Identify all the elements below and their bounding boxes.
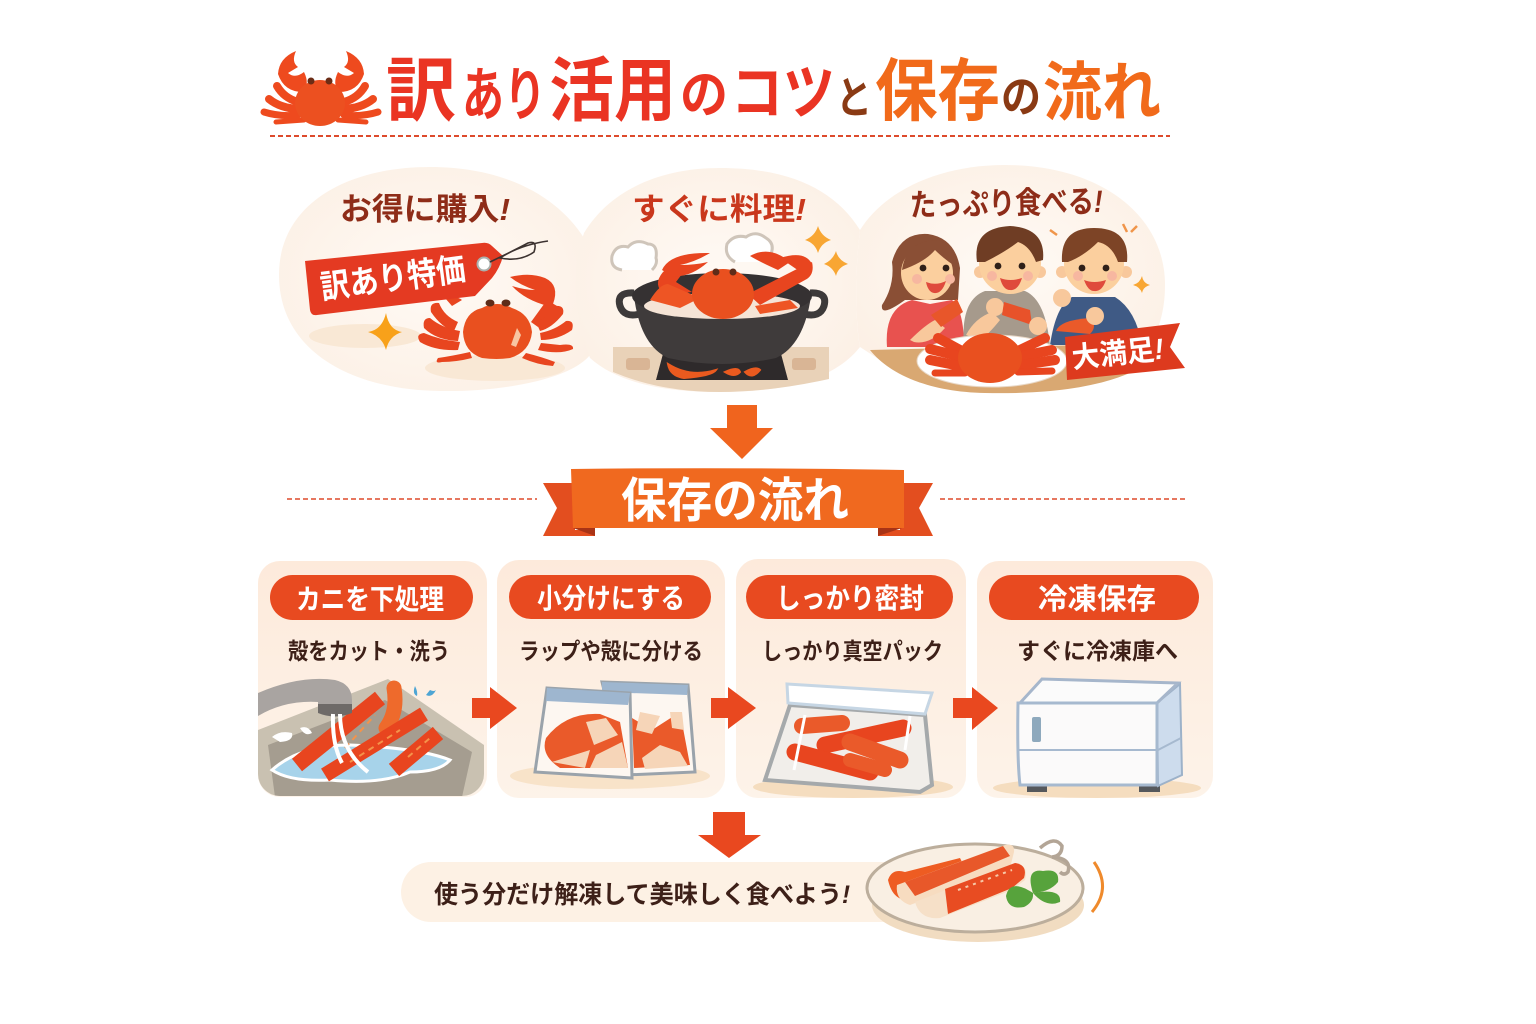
icon: price tag: 訳あり特価 <box>318 250 468 306</box>
icon: woman <box>882 234 964 347</box>
illustration: sink <box>258 679 487 797</box>
callout: satisfaction banner: 大満足! <box>1070 332 1166 375</box>
panel: step 2 portion <box>497 560 725 798</box>
panel: eat plenty <box>856 165 1185 393</box>
heading: bargain: お得に購入! <box>340 192 510 227</box>
heading: red part: コツ <box>731 60 835 127</box>
text: step 2 description: ラップや殻に分ける <box>519 638 703 664</box>
illustration: freezer <box>1018 679 1182 792</box>
label: step 3: しっかり密封 <box>776 583 924 614</box>
heading: eat: たっぷり食べる! <box>909 184 1103 223</box>
heading: cook: すぐに料理 ! <box>632 192 806 227</box>
heading: connector 2: の <box>1001 73 1041 122</box>
icon: sparkle <box>368 313 402 350</box>
icon: steam <box>1040 841 1069 874</box>
callout: satisfaction banner <box>1065 323 1185 380</box>
icon: joy marks <box>1050 224 1137 235</box>
icon: table <box>870 344 1132 393</box>
icon: garnish leaves <box>1006 870 1060 908</box>
arrow: down to storage <box>710 405 773 459</box>
arrow: step 2 to 3 <box>711 687 756 729</box>
icon: boy <box>1050 228 1142 345</box>
panel: step 4 freeze <box>977 561 1213 798</box>
illustration: plated crab legs <box>867 841 1103 942</box>
icon: sparkles <box>805 226 848 276</box>
label: step 4 <box>989 575 1199 620</box>
title with crab icon <box>264 51 1161 130</box>
icon: flames <box>668 364 760 378</box>
panel: step 3 seal <box>736 559 966 798</box>
heading: orange part: 流れ <box>1043 57 1161 129</box>
heading: red part: の <box>680 67 728 125</box>
label: step 1 <box>270 575 473 620</box>
heading: orange part <box>875 54 1161 130</box>
panel: cook right away <box>576 168 860 392</box>
icon: stove <box>613 347 829 392</box>
label: step 1: カニを下処理 <box>296 584 444 615</box>
icon: price tag <box>305 241 548 315</box>
heading: red part <box>386 52 835 130</box>
icon: steam clouds <box>612 234 772 270</box>
text: step 4 description: すぐに冷凍庫へ <box>1017 638 1178 664</box>
panel: step 1 prep <box>258 561 487 797</box>
illustration: vacuum bag <box>765 684 932 792</box>
callout: conclusion <box>401 862 921 922</box>
panel: buy at a bargain <box>279 167 590 391</box>
callout: conclusion: 使う分だけ解凍して美味しく食べよう! <box>434 881 850 909</box>
heading: orange part: 保存 <box>875 54 1000 130</box>
heading: red part: 活 <box>549 52 614 130</box>
icon: crab <box>418 275 573 366</box>
arrow: step 1 to 2 <box>472 687 517 729</box>
arrow: step 3 to 4 <box>953 687 998 730</box>
section banner: 保存の流れ <box>621 475 849 528</box>
icon: pot with crab <box>619 252 825 364</box>
heading: red part: 訳 <box>386 52 456 130</box>
label: step 4: 冷凍保存 <box>1038 583 1156 616</box>
icon: man <box>963 226 1050 347</box>
illustration: freezer bags <box>535 682 695 778</box>
arrow: down to conclusion <box>698 812 761 858</box>
text: step 3 description: しっかり真空パック <box>762 638 943 664</box>
decoration: orange arc <box>1092 862 1103 912</box>
heading: connector: と <box>836 74 872 123</box>
text: step 1 description: 殻をカット・洗う <box>288 638 450 664</box>
icon: plate with crab <box>917 333 1067 387</box>
heading: red part: 用 <box>614 52 676 130</box>
icon: small sparkle <box>1133 276 1150 293</box>
label: step 3 <box>746 575 953 619</box>
icon: title crab <box>264 51 378 126</box>
section banner <box>543 468 933 536</box>
label: step 2: 小分けにする <box>537 583 685 614</box>
label: step 2 <box>509 575 711 619</box>
heading: red part: あり <box>462 63 546 128</box>
